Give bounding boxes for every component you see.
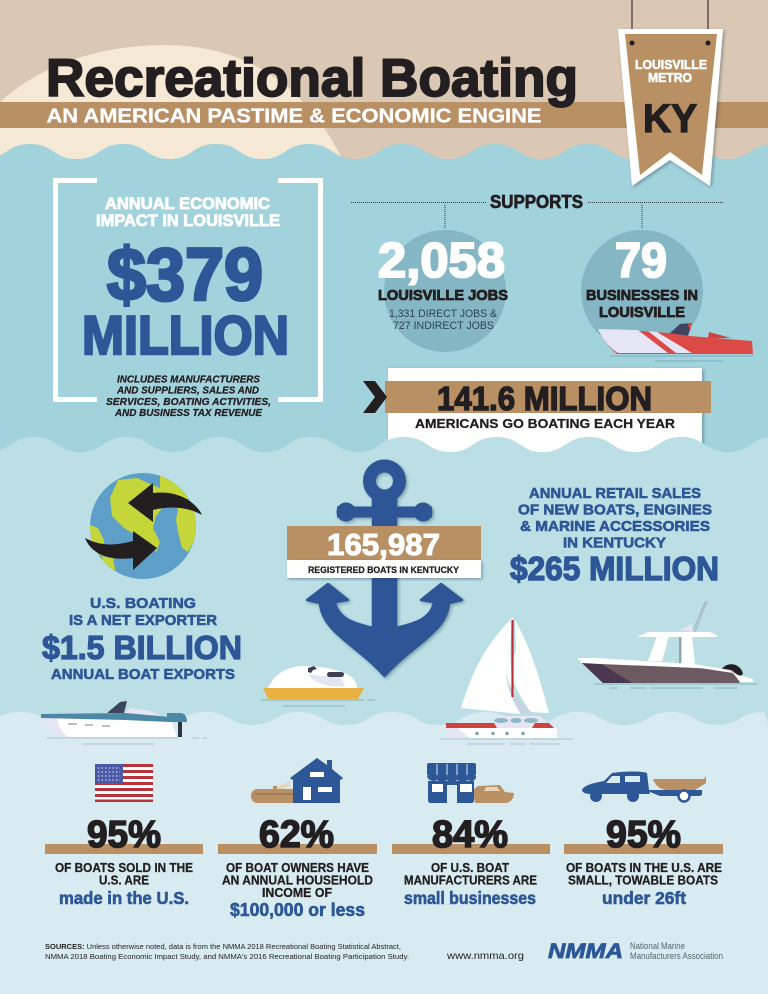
- description line 2: AN ANNUAL HOUSEHOLD: [222, 874, 373, 888]
- pennant city line 2: METRO: [648, 71, 692, 85]
- water: middle wave: [0, 437, 768, 994]
- icon: motorboat: [41, 701, 207, 744]
- icon: storefront and boat: [427, 763, 514, 803]
- highlight: under 26ft: [602, 888, 686, 908]
- boats label: REGISTERED BOATS IN KENTUCKY: [308, 565, 460, 576]
- footer: NMMA logo: NMMA: [548, 940, 623, 963]
- supports connector lines: [351, 202, 723, 228]
- ribbon: [385, 381, 711, 413]
- retail line 3: & MARINE ACCESSORIES: [520, 518, 710, 535]
- pennant city: LOUISVILLE: [635, 58, 707, 72]
- icon: american flag: [95, 764, 153, 802]
- percent: 95%: [87, 814, 161, 856]
- divider bar: [564, 844, 723, 854]
- description line 2: MANUFACTURERS ARE: [404, 874, 537, 888]
- note line 2: AND SUPPLIERS, SALES AND: [116, 386, 259, 396]
- highlight: made in the U.S.: [59, 888, 189, 908]
- description line 1: OF BOATS SOLD IN THE: [55, 861, 193, 875]
- retail line 4: IN KENTUCKY: [563, 534, 666, 552]
- pennant state: KY: [643, 97, 697, 141]
- boats count ribbon: [287, 526, 481, 560]
- bracket right: [278, 180, 320, 400]
- footer: sources: SOURCES: Unless otherwise noted, data is from the NMMA 2018 Recreational Boating Statistical Abstract,: [45, 942, 401, 951]
- heading line 1: ANNUAL ECONOMIC: [105, 195, 270, 213]
- jobs label: LOUISVILLE JOBS: [378, 287, 508, 304]
- percent: 95%: [606, 814, 681, 856]
- highlight: $100,000 or less: [230, 899, 365, 920]
- icon: sailboat: [440, 617, 573, 744]
- icon: export arrow top: [128, 483, 202, 522]
- title: Recreational Boating: [46, 49, 578, 108]
- retail line 1: ANNUAL RETAIL SALES: [529, 485, 701, 502]
- jobs circle: [384, 230, 506, 352]
- icon: chevron: [363, 381, 387, 413]
- divider bar: [392, 844, 550, 854]
- icon: globe: [85, 473, 202, 579]
- panel: stat household income: [218, 758, 377, 920]
- jobs detail line 1: 1,331 DIRECT JOBS &: [389, 308, 498, 320]
- retail line 2: OF NEW BOATS, ENGINES: [518, 502, 712, 518]
- footer: website: www.nmma.org: [446, 950, 524, 962]
- icon: anchor: [307, 466, 462, 676]
- heading line 2: IMPACT IN LOUISVILLE: [96, 212, 280, 230]
- supports heading: SUPPORTS: [490, 192, 583, 212]
- subtitle band: [0, 102, 768, 128]
- subtitle: AN AMERICAN PASTIME & ECONOMIC ENGINE: [46, 106, 542, 128]
- panel: annual economic impact: [56, 180, 320, 419]
- panel: supports: [351, 192, 753, 361]
- panel: stat small businesses: [392, 763, 550, 908]
- boaters label: AMERICANS GO BOATING EACH YEAR: [415, 417, 675, 431]
- icon: boat beside house: [251, 758, 343, 803]
- description line 2: U.S. ARE: [99, 874, 149, 888]
- note line 4: AND BUSINESS TAX REVENUE: [114, 408, 262, 419]
- location pennant: [618, 0, 723, 186]
- exporter label: ANNUAL BOAT EXPORTS: [51, 666, 235, 683]
- bracket left: [56, 180, 97, 400]
- divider bar: [218, 844, 377, 854]
- panel: retail sales: [510, 485, 719, 587]
- water: bottom wave: [0, 712, 768, 994]
- note line 1: INCLUDES MANUFACTURERS: [117, 374, 260, 386]
- pennant wires: [632, 0, 708, 30]
- businesses circle: [581, 230, 703, 352]
- description line 3: INCOME OF: [262, 886, 332, 900]
- boaters value: 141.6 MILLION: [437, 380, 652, 417]
- panel: net exporter: [42, 473, 242, 683]
- icon: export arrow bottom: [85, 531, 157, 570]
- description line 1: OF BOATS IN THE U.S. ARE: [566, 861, 722, 875]
- footer: sources line 2: NMMA 2018 Boating Economic Impact Study, and NMMA's 2016 Recreational Boating Participation Study.: [45, 952, 409, 961]
- jobs detail line 2: 727 INDIRECT JOBS: [393, 320, 494, 332]
- footer: association name line 2: Manufacturers Association: [630, 951, 723, 961]
- icon: fishing boat: [577, 601, 757, 688]
- description line 2: SMALL, TOWABLE BOATS: [568, 874, 718, 888]
- exporter heading line 1: U.S. BOATING: [90, 595, 196, 612]
- retail value: $265 MILLION: [510, 550, 719, 587]
- businesses label: BUSINESSES IN: [586, 287, 698, 304]
- icon: red speedboat: [598, 323, 753, 361]
- exporter value: $1.5 BILLION: [42, 629, 242, 666]
- pennant frame: [618, 29, 723, 186]
- divider bar: [45, 844, 203, 854]
- jobs value: 2,058: [378, 234, 505, 288]
- note line 3: SERVICES, BOATING ACTIVITIES,: [106, 397, 271, 408]
- highlight: small businesses: [404, 888, 536, 908]
- value: $379: [107, 233, 263, 316]
- panel: registered boats anchor: [287, 466, 481, 676]
- boats label box: [287, 560, 481, 578]
- boats value: 165,987: [327, 527, 440, 562]
- background: cream sun arc: [0, 45, 345, 165]
- panel: americans go boating: [363, 368, 711, 458]
- percent: 84%: [432, 814, 508, 856]
- exporter heading line 2: IS A NET EXPORTER: [69, 612, 217, 629]
- footer: association name: National Marine: [630, 941, 685, 951]
- pennant holes: [630, 40, 710, 46]
- pennant body: [625, 34, 717, 175]
- description line 1: OF U.S. BOAT: [431, 861, 509, 875]
- icon: jet ski: [261, 666, 375, 706]
- panel: stat made in the US: [45, 764, 203, 908]
- icon: truck towing boat: [582, 772, 706, 802]
- value unit: MILLION: [82, 304, 289, 366]
- panel: stat towable boats: [564, 772, 723, 908]
- white card: [388, 368, 702, 458]
- businesses value: 79: [615, 234, 667, 288]
- businesses label line 2: LOUISVILLE: [599, 304, 685, 321]
- description line 1: OF BOAT OWNERS HAVE: [226, 861, 369, 875]
- percent: 62%: [259, 814, 334, 856]
